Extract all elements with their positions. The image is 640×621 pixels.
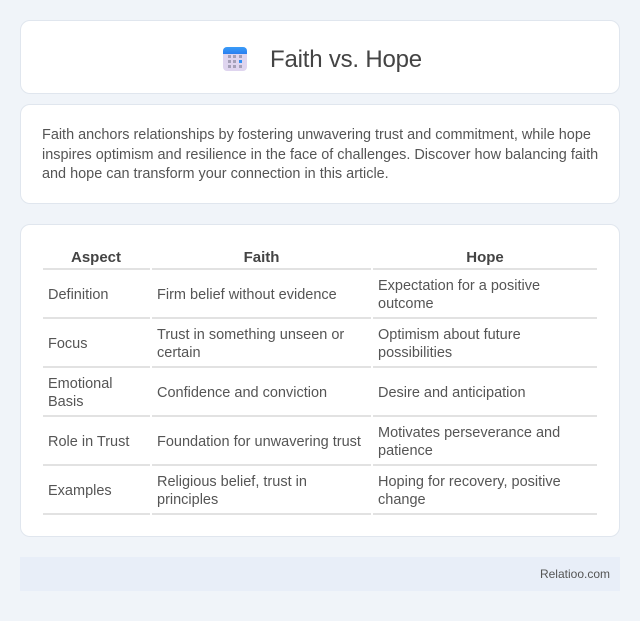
row: Role in Trust: Role in Trust [48,434,129,450]
row: Definition [48,278,540,312]
panel: introduction [20,104,620,204]
footer brand text: Relatioo.com [540,567,610,581]
row: Definition: Firm belief without evidence [157,287,337,303]
title: Faith vs. Hope [270,46,422,73]
row: Definition: Definition [48,287,108,303]
row: Role in Trust: Foundation for unwavering trust [157,434,361,450]
row: Examples: Religious belief, trust in [157,474,307,490]
row: Examples: Examples [48,483,112,499]
row: Focus: certain [157,345,201,361]
footer bar [20,557,620,591]
row: Focus [48,327,521,361]
panel: header [20,20,620,94]
row: Role in Trust: patience [378,443,433,459]
row: Emotional Basis: Confidence and conviction [157,385,327,401]
column heading: Hope: Hope [466,249,504,266]
row: Emotional Basis: Desire and anticipation [378,385,526,401]
row: Definition: Expectation for a positive [378,278,540,294]
column heading: Aspect: Aspect [71,249,121,266]
row: Focus: Optimism about future [378,327,521,343]
icon: calendar [223,47,247,71]
intro text: and hope can transform your connection in this article. [42,166,389,182]
row: Examples: change [378,492,426,508]
row: Emotional Basis [48,376,526,410]
row: Focus: Focus [48,336,88,352]
intro text [42,127,598,182]
row: Emotional Basis: Basis [48,394,83,410]
intro text: inspires optimism and resilience in the face of challenges. Discover how balancing faith [42,147,598,163]
row: Examples: Hoping for recovery, positive [378,474,561,490]
row: Emotional Basis: Emotional [48,376,112,392]
row: Examples [48,474,561,508]
row: Definition: outcome [378,296,434,312]
table header row [71,249,504,266]
row: Role in Trust: Motivates perseverance and [378,425,560,441]
column heading: Faith: Faith [244,249,279,266]
row: Role in Trust [48,425,560,459]
row: Focus: Trust in something unseen or [157,327,344,343]
row: Examples: principles [157,492,218,508]
intro text: Faith anchors relationships by fostering unwavering trust and commitment, while hope [42,127,591,143]
row: Focus: possibilities [378,345,452,361]
panel: comparison table [20,224,620,537]
